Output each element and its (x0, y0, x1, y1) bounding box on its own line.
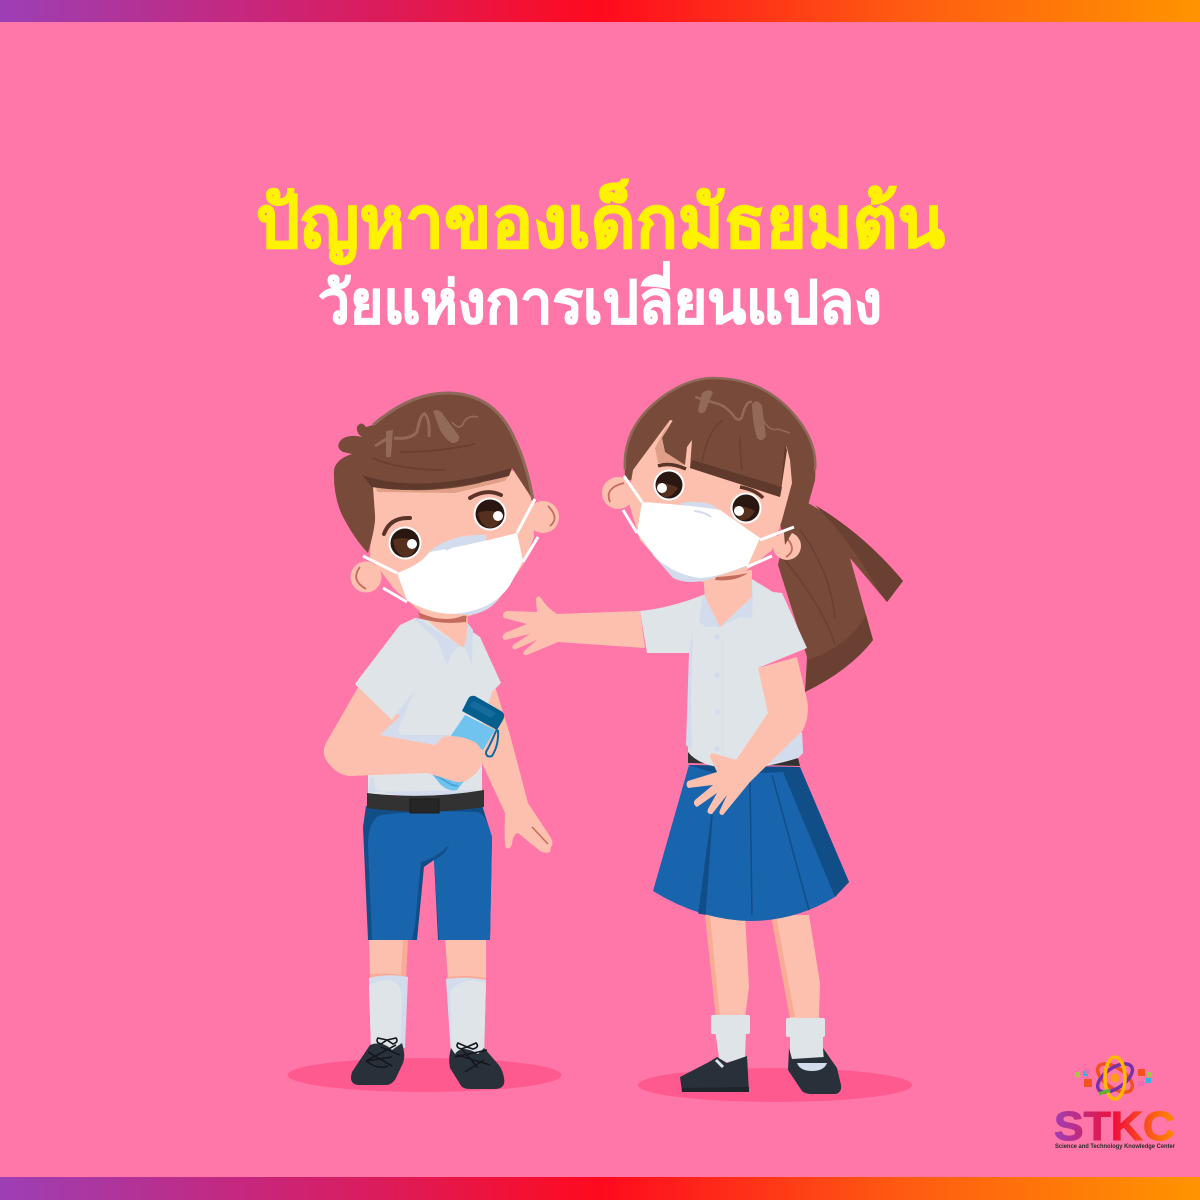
boy eyebrows (384, 492, 501, 534)
girl outstretched arm and hand (502, 596, 645, 655)
STKC logo (1054, 1057, 1176, 1150)
boy legs (369, 938, 486, 982)
girl arm and hand on skirt (686, 657, 808, 815)
boy face (370, 470, 534, 616)
girl student (502, 378, 903, 1094)
ground shadow: boy (288, 1058, 562, 1092)
boy left sleeve (355, 625, 420, 720)
boy ear left (350, 562, 382, 592)
logo tagline: Science and Technology Knowledge Center (1055, 1144, 1176, 1150)
girl belt (688, 752, 800, 768)
boy right arm (482, 686, 552, 853)
girl shoes (680, 1048, 841, 1094)
logo atom icon (1093, 1057, 1137, 1099)
boy arm crease (532, 827, 548, 844)
boy chin shadow (418, 612, 467, 623)
girl ear left (602, 477, 634, 509)
logo wordmark: STKC (1054, 1103, 1175, 1149)
girl legs (705, 915, 820, 1018)
girl hair back (625, 378, 815, 545)
girl eye right (730, 492, 762, 524)
girl face (628, 420, 792, 582)
boy shoes (351, 1038, 504, 1089)
girl ear right (773, 532, 801, 560)
top gradient bar (0, 0, 1200, 22)
boy ear right (527, 501, 559, 533)
boy mask (363, 499, 538, 615)
boy shirt folds (368, 688, 480, 797)
girl mask (623, 476, 794, 582)
boy eye right (474, 498, 506, 530)
boy student (324, 393, 559, 1089)
girl eye left (654, 470, 684, 500)
boy socks (369, 975, 486, 1055)
girl collar (699, 578, 754, 627)
girl ear creases (609, 483, 792, 557)
water bottle (430, 696, 504, 790)
boy neck (418, 612, 468, 648)
boy hair (334, 393, 533, 553)
boy belt (367, 790, 484, 813)
boy left arm holding bottle (324, 684, 483, 782)
subtitle: วัยแห่งการเปลี่ยนแปลง (318, 261, 882, 336)
boy ear creases (356, 506, 555, 589)
girl eyebrow (658, 465, 763, 498)
girl ponytail (778, 503, 903, 692)
boy shorts (363, 805, 492, 940)
girl shirt (640, 578, 807, 768)
girl socks (711, 1015, 825, 1064)
boy collar (415, 618, 473, 665)
title: ปัญหาของเด็กมัธยมต้น (256, 179, 945, 265)
boy eye left (388, 526, 422, 560)
boy shirt (355, 618, 501, 795)
ground shadow: girl (638, 1068, 912, 1102)
girl neck (703, 570, 752, 627)
bottom gradient bar (0, 1177, 1200, 1200)
girl hair front (625, 378, 815, 545)
logo coloured squares (1075, 1069, 1152, 1087)
girl skirt (653, 765, 849, 921)
